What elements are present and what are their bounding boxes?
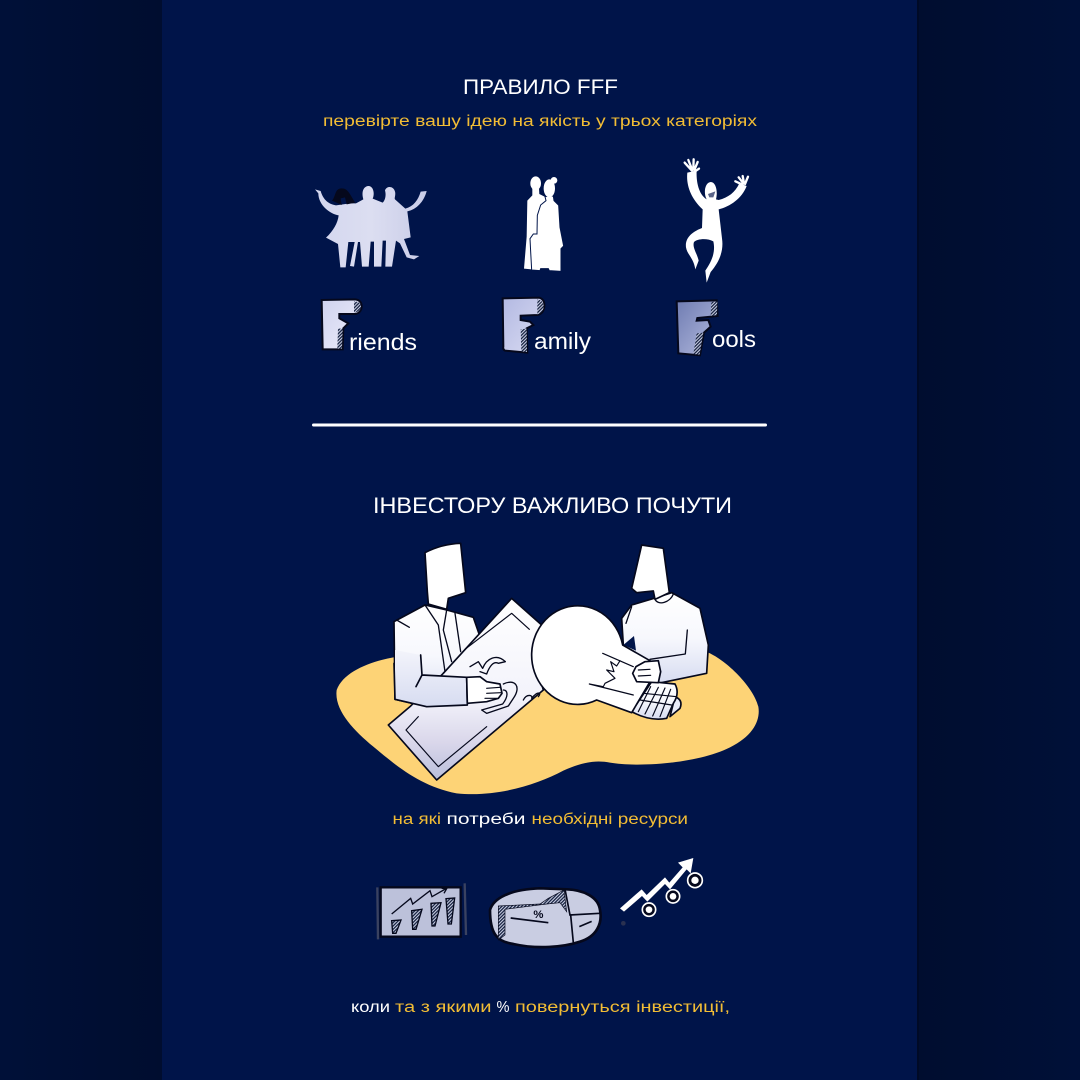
illustration: investors with banknote and light bulb [336, 543, 759, 794]
banknote [388, 598, 543, 780]
left man sleeve [394, 650, 467, 707]
heading: Fools letter and word: ools [712, 326, 756, 352]
left hand [467, 677, 502, 703]
divider [312, 424, 767, 426]
text: for what needs resources are required: потреби [446, 811, 526, 828]
subtitle: check your idea: перевірте вашу ідею на якість у трьох категоріях [323, 113, 757, 130]
text: when and with what percentage investments return: повернуться інвестиції, [515, 999, 730, 1016]
heading: Friends letter and word: riends [349, 329, 417, 355]
heading: Family letter and word: amily [534, 328, 592, 354]
heading: Fools letter and word [677, 300, 756, 355]
icon: family silhouette [524, 176, 564, 271]
text: when and with what percentage investments return [351, 999, 730, 1016]
text: when and with what percentage investments return: та з якими [395, 999, 492, 1016]
background: central panel [162, 0, 917, 1080]
right man [622, 545, 708, 683]
heading: Family letter and word [503, 298, 592, 354]
icon: percentage pie: % [533, 909, 543, 921]
heading: Friends letter and word [322, 299, 417, 355]
icon: fool jumping silhouette [685, 159, 748, 283]
heading: what the investor needs to hear: ІНВЕСТОРУ ВАЖЛИВО ПОЧУТИ [373, 493, 732, 518]
title: FFF rule: ПРАВИЛО FFF [463, 76, 618, 99]
icon: rising arrow with coins [620, 858, 702, 926]
text: when and with what percentage investments return: коли [351, 999, 390, 1016]
text: when and with what percentage investments return: % [496, 999, 510, 1016]
text: for what needs resources are required: необхідні ресурси [532, 811, 688, 828]
text: for what needs resources are required [392, 811, 688, 828]
bulb base [632, 682, 681, 719]
icon: percentage pie [490, 888, 601, 947]
text: for what needs resources are required: на які [392, 811, 441, 828]
light bulb [532, 606, 658, 713]
right hand [633, 661, 661, 683]
yellow blob background [336, 643, 759, 794]
left man torso and head [394, 543, 480, 707]
icon: friends silhouette [315, 186, 427, 267]
icon: growth chart board [377, 883, 466, 939]
